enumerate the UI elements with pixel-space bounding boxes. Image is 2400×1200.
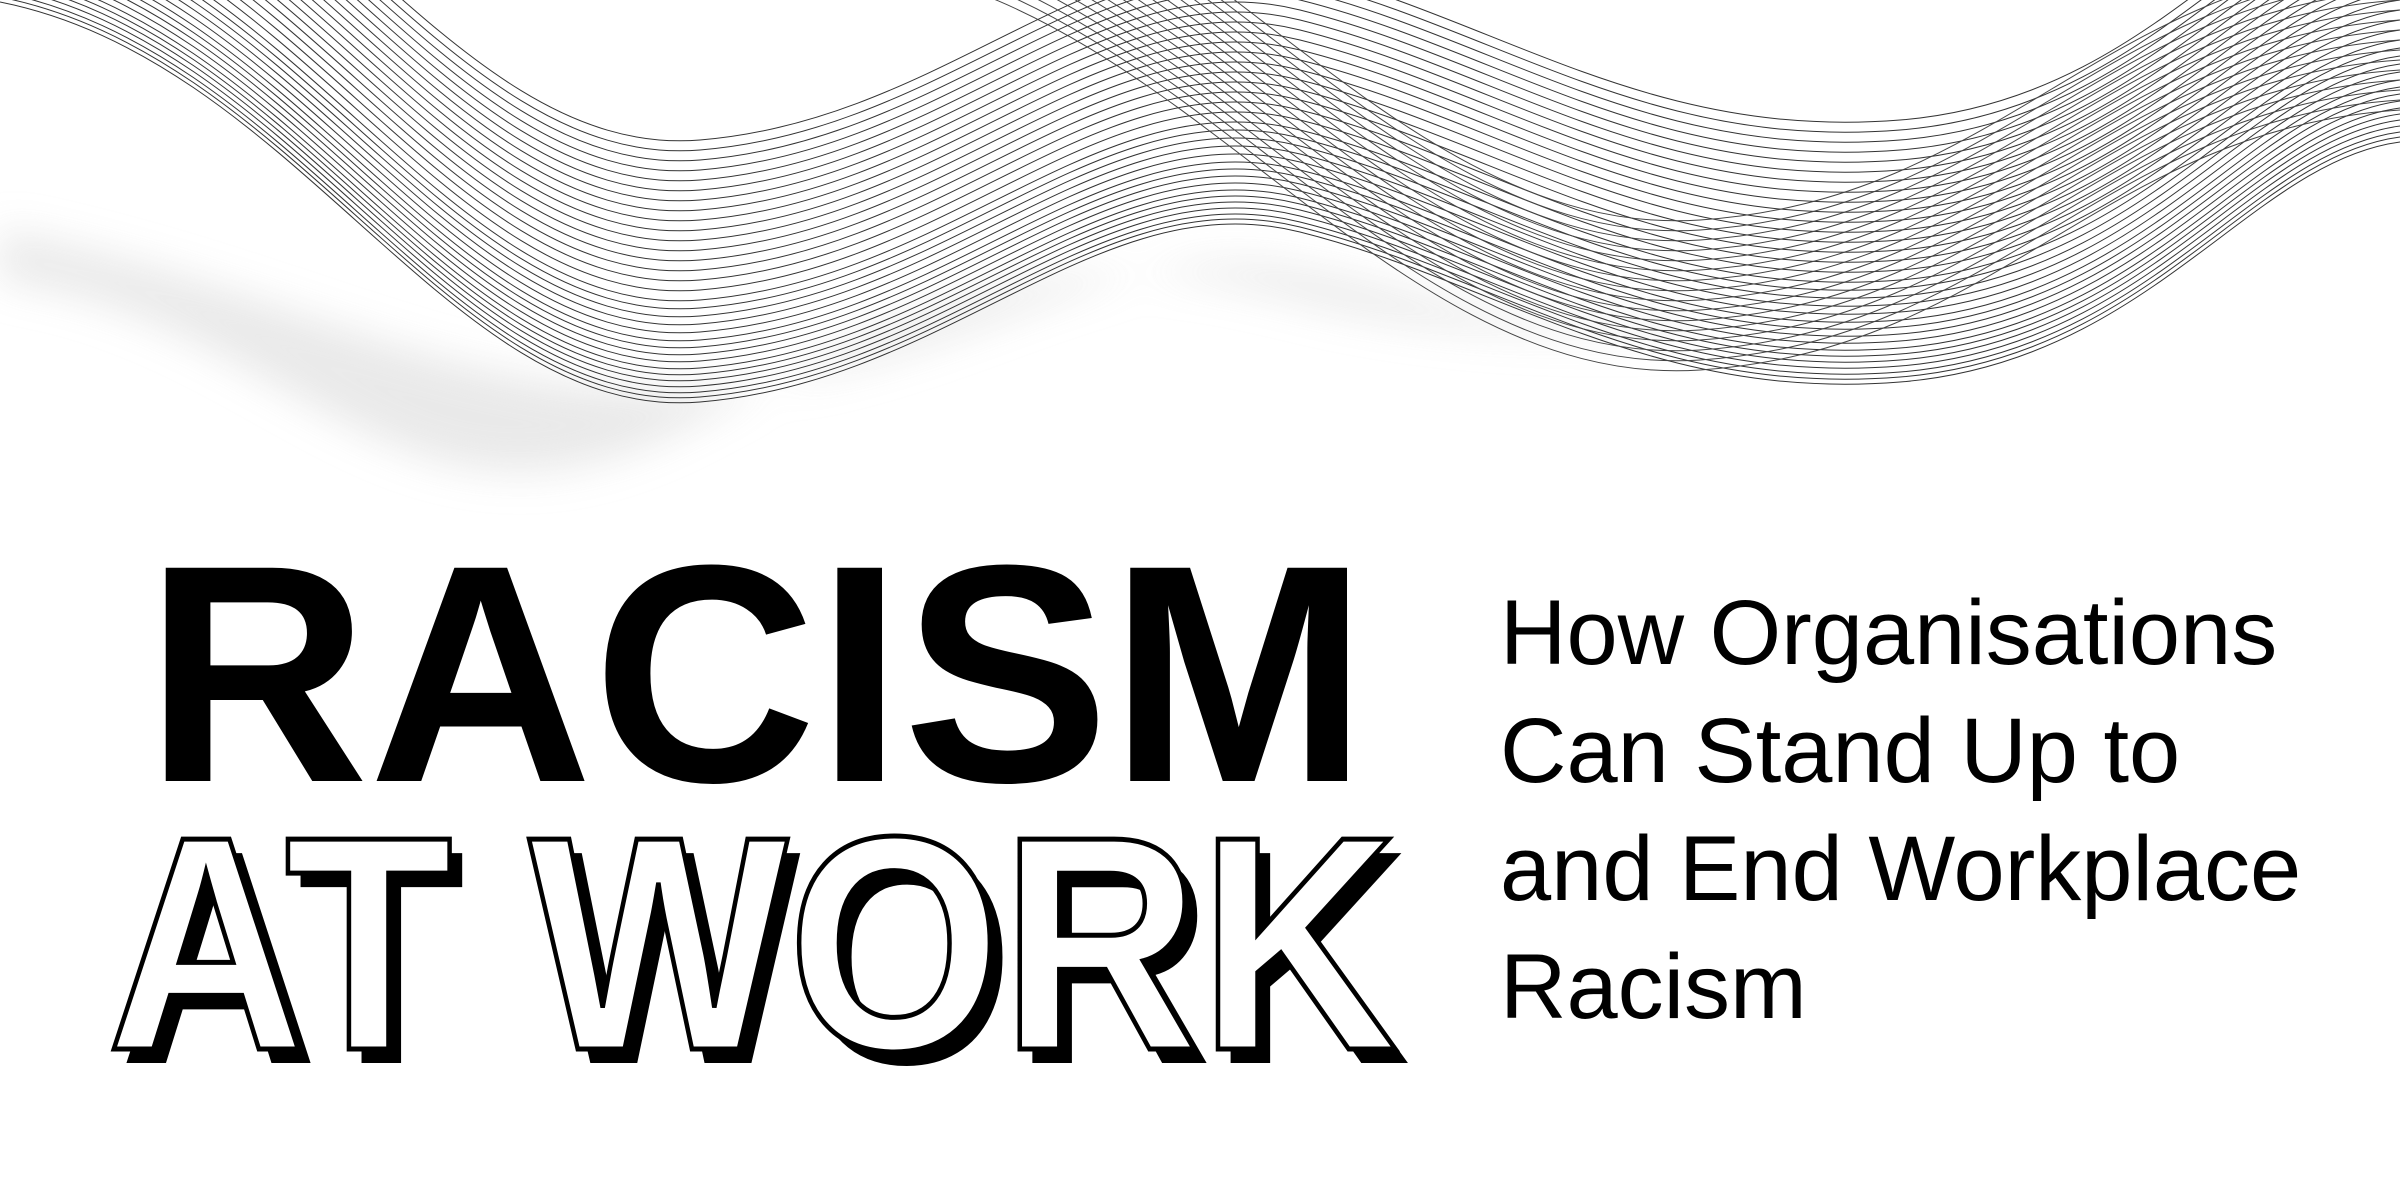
decorative wave lines xyxy=(0,0,2400,476)
title: RACISM: RACISM xyxy=(145,500,1368,847)
title: AT WORK: AT WORK xyxy=(107,773,1398,1114)
subtitle: and End Workplace xyxy=(1500,818,2301,920)
subtitle: Can Stand Up to xyxy=(1500,700,2180,802)
subtitle: Racism xyxy=(1500,936,1807,1038)
subtitle: How Organisations xyxy=(1500,582,2277,684)
subtitle xyxy=(1500,582,2301,1038)
